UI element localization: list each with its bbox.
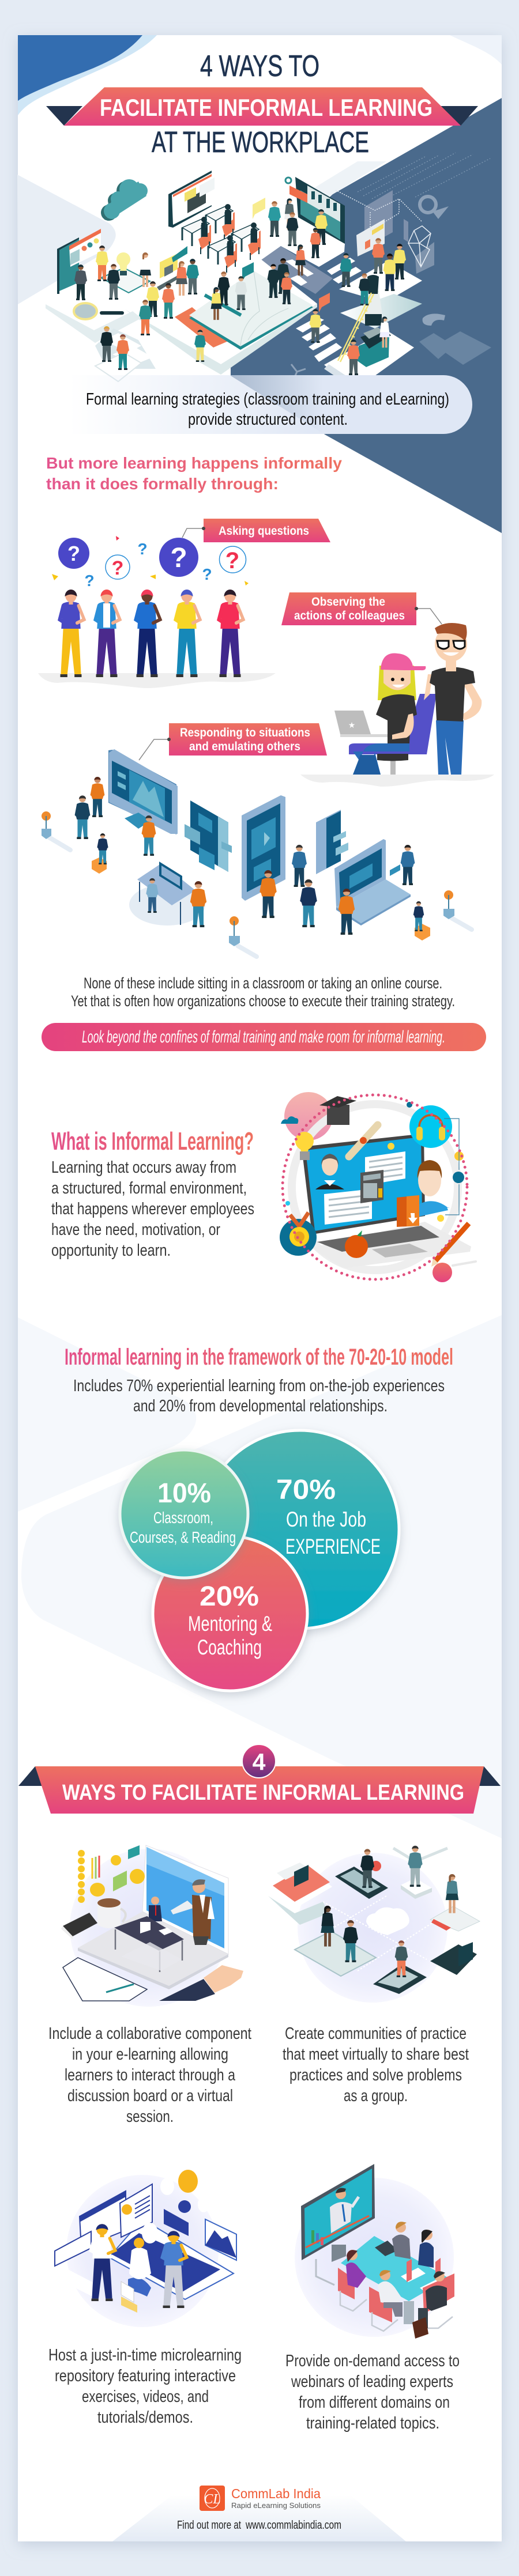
definition text: have the need, motivation, or (51, 1221, 220, 1239)
title: at the workplace: AT THE WORKPLACE (152, 126, 369, 158)
way 4: webinars (285, 2164, 460, 2433)
people in the hero (74, 198, 406, 375)
panel: asking questions (38, 519, 330, 688)
ribbon: responding: Responding to situations (180, 726, 310, 739)
illustration: connected platforms (268, 1846, 480, 2003)
people (91, 2224, 115, 2301)
presenter (171, 1901, 195, 1914)
title ribbon: FACILITATE INFORMAL LEARNING (100, 94, 432, 121)
chairs (338, 2258, 454, 2322)
pencil (435, 1223, 469, 1261)
speech bubbles (253, 198, 265, 219)
caption 2: practices and solve problems (289, 2066, 462, 2084)
brand name: CommLab India (231, 2486, 321, 2501)
circle: 20%: Mentoring & (188, 1612, 272, 1636)
caption 3 (48, 2346, 242, 2427)
seated people (346, 2263, 366, 2288)
logo: CL (204, 2492, 221, 2507)
cloud (101, 179, 148, 221)
illustration: phone with content cards (55, 2170, 236, 2327)
student avatar (416, 1207, 448, 1217)
question bubbles: ? (84, 572, 95, 590)
girl with laptop (334, 654, 426, 775)
caption 1: learners to interact through a (65, 2066, 235, 2084)
text: includes (73, 1377, 445, 1415)
envelope (121, 2297, 137, 2313)
badge: 4 (242, 1744, 276, 1778)
footer (112, 2486, 406, 2541)
find out more: www.commlabindia.com (245, 2519, 341, 2532)
cloud (366, 1908, 409, 1935)
question bubbles: ? (137, 540, 148, 558)
find out more (177, 2519, 341, 2532)
desk (129, 862, 205, 926)
brand name: Rapid eLearning Solutions (231, 2501, 321, 2510)
intro text (86, 390, 449, 429)
microscope and ladder (363, 291, 383, 323)
small people (75, 777, 424, 935)
way 3: microlearning repository (48, 2170, 242, 2427)
desk (114, 1916, 184, 1951)
desks (182, 217, 211, 254)
ground (38, 673, 276, 688)
laptop (334, 839, 411, 926)
panel: hero background shapes (17, 35, 502, 533)
circle: 10%: Courses, & Reading (130, 1528, 236, 1546)
definition text: that happens wherever employees (51, 1200, 254, 1218)
tablet left (57, 237, 79, 294)
arm (159, 1979, 215, 2001)
heading: What is Informal Learning? (51, 1127, 254, 1155)
caption 4: training-related topics. (306, 2414, 439, 2433)
panel: responding to situations (42, 723, 472, 957)
way 2: communities of practice (268, 1846, 480, 2105)
question bubbles: ? (67, 542, 80, 565)
notebook (63, 1958, 147, 2001)
panel: what is informal learning (51, 1092, 476, 1282)
definition text: opportunity to learn. (51, 1241, 171, 1260)
definition text: Learning that occurs away from (51, 1158, 236, 1177)
book and pen (175, 307, 231, 348)
circle: 70%: On the Job (286, 1508, 366, 1531)
way 1: collaborative component (48, 1845, 251, 2126)
dotted ring (283, 1095, 467, 1279)
caption 3: Host a just-in-time microlearning (48, 2346, 242, 2365)
subheading: but more learning: than it does formally through: (46, 475, 279, 493)
girl with laptop: ★ (348, 720, 355, 730)
ribbon: observing: Observing the (311, 595, 385, 609)
circle: 70% (201, 1430, 399, 1629)
caption 4: webinars of leading experts (291, 2373, 453, 2391)
title ribbon (46, 88, 478, 126)
intro text: provide structured content. (188, 410, 348, 429)
plants and cubes (42, 811, 472, 957)
circle: 10%: Classroom, (153, 1509, 213, 1527)
venn diagram (120, 1430, 399, 1691)
logo (200, 2486, 225, 2511)
caption 1: discussion board or a virtual (67, 2087, 233, 2105)
caption 3: repository featuring interactive (55, 2367, 236, 2385)
caption 3: tutorials/demos. (97, 2408, 193, 2427)
text: none of these (71, 975, 455, 1010)
people talking (60, 590, 243, 677)
caption 2: Create communities of practice (285, 2024, 467, 2043)
hero illustration: isometric learning campus (46, 153, 491, 382)
laptop screen (302, 1134, 425, 1234)
man with glasses (424, 623, 482, 775)
caption 1 (48, 2024, 251, 2126)
caption 4 (285, 2352, 460, 2433)
coins and icons (78, 1850, 145, 1903)
tv (301, 2164, 375, 2260)
people (360, 1849, 374, 1888)
book (397, 1195, 419, 1227)
phone (63, 1913, 97, 1936)
calculator (360, 1170, 383, 1203)
banner: 4 ways to facilitate informal learning (18, 1744, 501, 1814)
caption 1: Include a collaborative component (48, 2024, 251, 2043)
tablet (242, 795, 285, 901)
ribbon: observing (281, 592, 442, 625)
circle: 70%: EXPERIENCE (285, 1535, 381, 1558)
panel: observing colleagues (281, 592, 494, 787)
panel: 70-20-10 model background (18, 1315, 502, 1838)
caption 4: Provide on-demand access to (285, 2352, 460, 2370)
find out more: Find out more at (177, 2519, 241, 2532)
caption 2 (283, 2024, 469, 2105)
subheading: but more learning: But more learning happens informally (46, 454, 342, 472)
subheading: but more learning (46, 454, 342, 493)
platform: strip (260, 246, 333, 294)
platform: stairs (285, 258, 362, 362)
text: includes: Includes 70% experiential learning from on-the-job experiences (73, 1377, 445, 1395)
platform: top screen (190, 177, 345, 274)
circle: 10%: 10% (157, 1478, 211, 1509)
caption 4: from different domains on (299, 2393, 450, 2412)
table (316, 2259, 334, 2285)
caption 1: in your e-learning allowing (72, 2045, 228, 2064)
intro pill (69, 375, 472, 434)
circle: 70%: 70% (276, 1475, 336, 1505)
circle: 20%: Coaching (197, 1636, 262, 1659)
small man (149, 1905, 162, 1921)
definition text: a structured, formal environment, (51, 1179, 247, 1198)
ribbon: responding (139, 723, 327, 760)
keyboard base (311, 1222, 471, 1268)
briefcase (412, 2317, 428, 2339)
question bubbles: ? (202, 565, 212, 583)
definition text (51, 1158, 254, 1260)
ribbon: asking questions (182, 519, 330, 542)
circle: 10% (120, 1450, 248, 1578)
chair (349, 694, 437, 754)
cup (97, 1903, 121, 1928)
brand name (231, 2486, 321, 2510)
mid panels (185, 800, 348, 874)
illustration: laptop with learning icons (280, 1092, 476, 1282)
medal (280, 1219, 317, 1256)
lightbulb table (101, 268, 150, 293)
ribbon: asking questions: Asking questions (219, 524, 309, 538)
bulb (295, 1132, 314, 1150)
magnifier (74, 303, 97, 319)
headphones (409, 1105, 452, 1148)
big screen: library (295, 177, 345, 244)
question bubbles: ? (112, 557, 123, 579)
question bubbles (52, 536, 249, 590)
caption 2: that meet virtually to share best (283, 2045, 469, 2064)
teacher avatar (315, 1184, 344, 1189)
illustration: webinar meeting (295, 2164, 454, 2339)
monitor (108, 749, 178, 834)
circle: 20%: 20% (200, 1581, 259, 1612)
platform: book (125, 254, 317, 369)
question bubbles: ? (170, 543, 187, 573)
circle: 20% (153, 1536, 307, 1691)
caption 2: as a group. (344, 2087, 408, 2105)
callout pill (42, 1023, 486, 1051)
apple (345, 1235, 368, 1258)
illustration: laptop with virtual session (61, 1845, 243, 2007)
badge: 4: 4 (253, 1748, 266, 1775)
caption 3: exercises, videos, and (82, 2388, 209, 2406)
question bubbles: ? (225, 548, 239, 573)
graduation cap (327, 1105, 349, 1125)
screen: classroom (168, 171, 212, 228)
diploma (349, 1125, 378, 1157)
ribbon: responding: and emulating others (189, 740, 300, 753)
banner: 4 ways to facilitate informal learning: WAYS TO FACILITATE INFORMAL LEARNING (62, 1781, 464, 1805)
text: includes: and 20% from developmental relationships. (133, 1397, 388, 1415)
ground (300, 775, 494, 787)
title: 4 ways to: 4 WAYS TO (200, 50, 319, 83)
caption 1: session. (126, 2107, 174, 2126)
platform: right (339, 261, 422, 303)
satellite dots and icons (388, 1143, 394, 1150)
ribbon: observing: actions of colleagues (294, 609, 405, 622)
